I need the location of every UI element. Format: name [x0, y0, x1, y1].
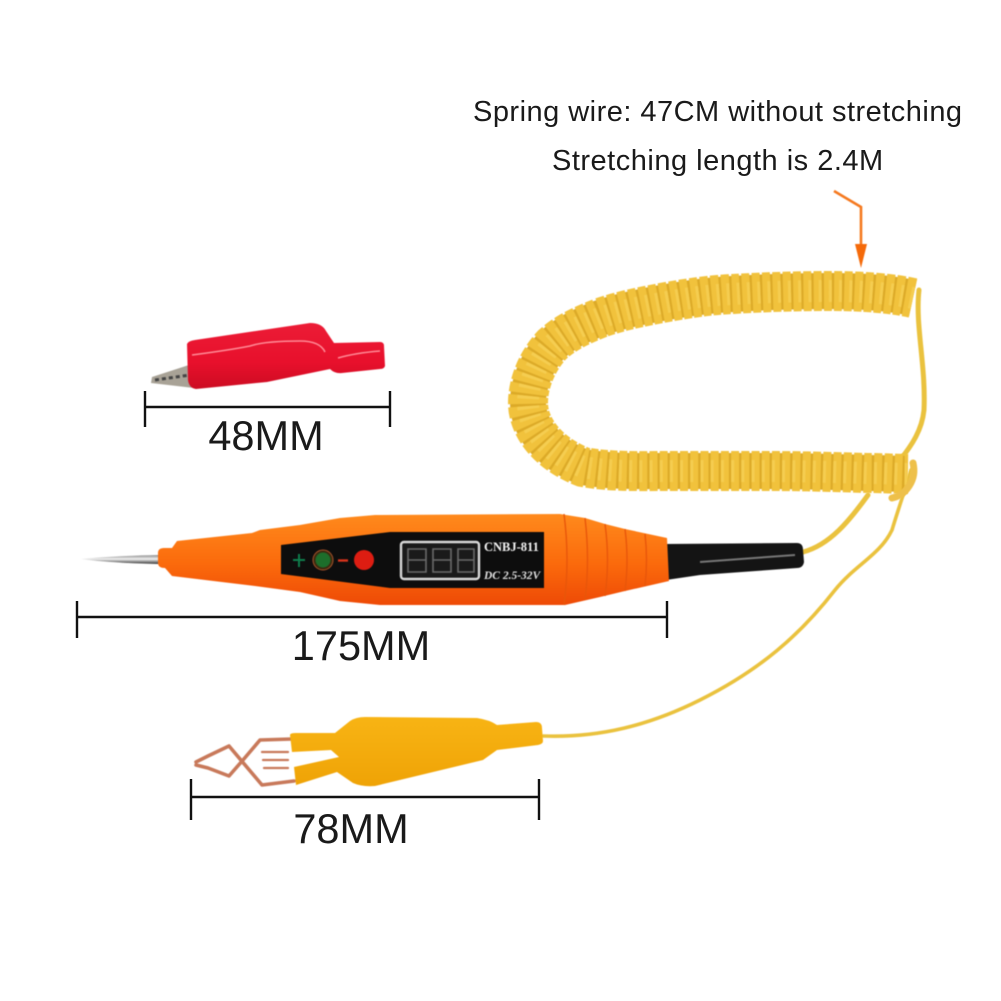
- label: 48MM: 48MM: [208, 412, 324, 459]
- black control panel: [281, 532, 544, 588]
- body ribs: [564, 514, 646, 605]
- label: 175MM: 175MM: [292, 622, 430, 669]
- metal probe tip: [81, 555, 158, 564]
- red rubber boot: [187, 323, 385, 389]
- plus sign: [293, 554, 305, 567]
- green LED: [313, 550, 333, 570]
- red LED: [354, 550, 374, 570]
- dimension: 78MM: [191, 779, 539, 820]
- arrow pointing to the coil: [834, 191, 867, 268]
- label: 78MM: 78MM: [293, 805, 409, 852]
- copper jaws: [196, 739, 294, 785]
- voltage label: DC 2.5-32V: [483, 570, 542, 582]
- coil end loop: [892, 463, 914, 498]
- model label: CNBJ-811: [484, 540, 539, 554]
- yellow rubber boot: [290, 717, 543, 786]
- clip metal jaw: [151, 364, 194, 388]
- LED digital display: [401, 542, 479, 579]
- sleeve highlight: [700, 555, 795, 562]
- heading: spring wire length: Spring wire: 47CM without stretching: [473, 96, 963, 128]
- dimension: 175MM: [77, 601, 667, 638]
- spring coil wire: [528, 291, 913, 474]
- minus sign: [338, 559, 348, 562]
- orange body: [158, 514, 669, 605]
- lead wires: [543, 290, 924, 736]
- tester pen: [81, 514, 804, 605]
- black cable sleeve: [666, 543, 804, 580]
- yellow alligator clip: [196, 717, 543, 786]
- boot highlight: [192, 341, 380, 358]
- red alligator clip: [151, 323, 385, 389]
- dimension: 48MM: [145, 391, 390, 427]
- heading: stretching length: Stretching length is 2.4M: [552, 145, 884, 177]
